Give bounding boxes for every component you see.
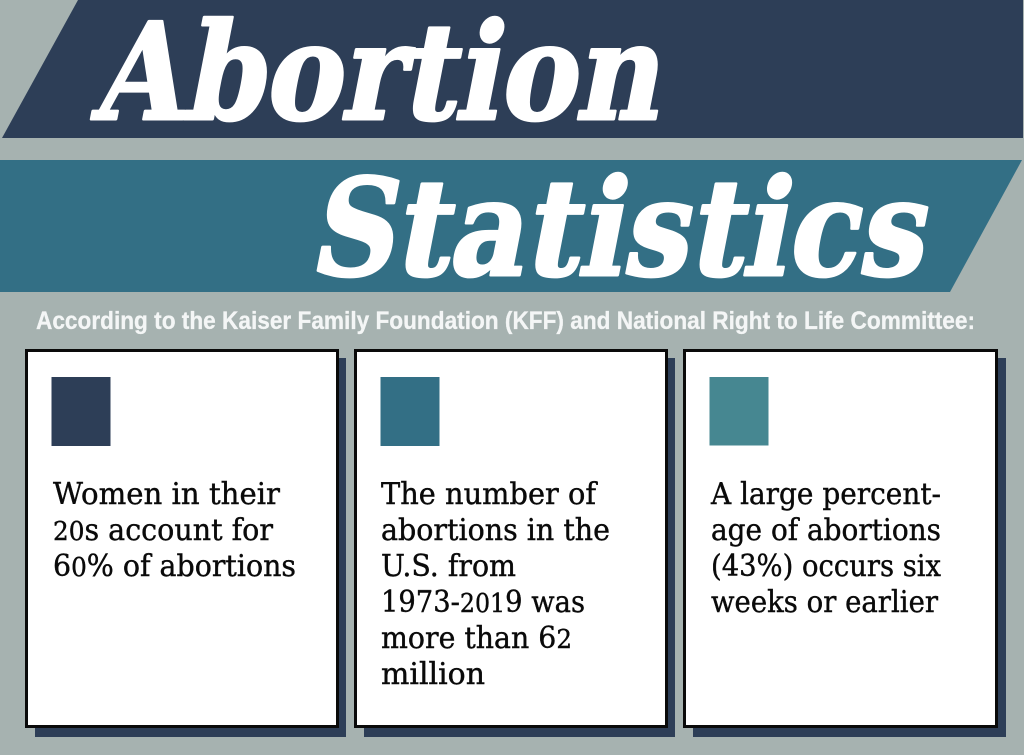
text: women statistic: 20s account for xyxy=(53,513,274,548)
text: timing statistic xyxy=(710,477,941,620)
text: total statistic xyxy=(381,477,610,692)
text: timing statistic: weeks or earlier xyxy=(711,585,939,620)
text: women statistic xyxy=(53,477,296,584)
text: timing statistic: (43%) occurs six xyxy=(711,549,941,584)
text: total statistic: U.S. from xyxy=(381,549,516,584)
banner: Abortion xyxy=(2,0,1023,151)
text: timing statistic: age of abortions xyxy=(711,513,941,548)
panel: total number of abortions xyxy=(356,350,675,737)
title: Statistics: Statistics xyxy=(302,149,946,307)
text: total statistic: million xyxy=(381,657,485,692)
panel: six weeks or earlier xyxy=(684,350,1006,737)
text: total statistic: 1973-2019 was xyxy=(381,585,585,620)
colour square: navy xyxy=(52,377,110,446)
colour square: teal blue xyxy=(380,377,440,446)
panel: women in their 20s xyxy=(26,350,346,737)
colour square: light teal xyxy=(710,377,768,446)
text: total statistic: The number of xyxy=(381,477,598,512)
banner: Statistics xyxy=(0,149,1022,307)
text: women statistic: Women in their xyxy=(53,477,281,512)
text: timing statistic: A large percent- xyxy=(710,477,941,512)
text: total statistic: abortions in the xyxy=(381,513,610,548)
text: women statistic: 60% of abortions xyxy=(53,549,296,584)
text: total statistic: more than 62 xyxy=(381,621,572,656)
